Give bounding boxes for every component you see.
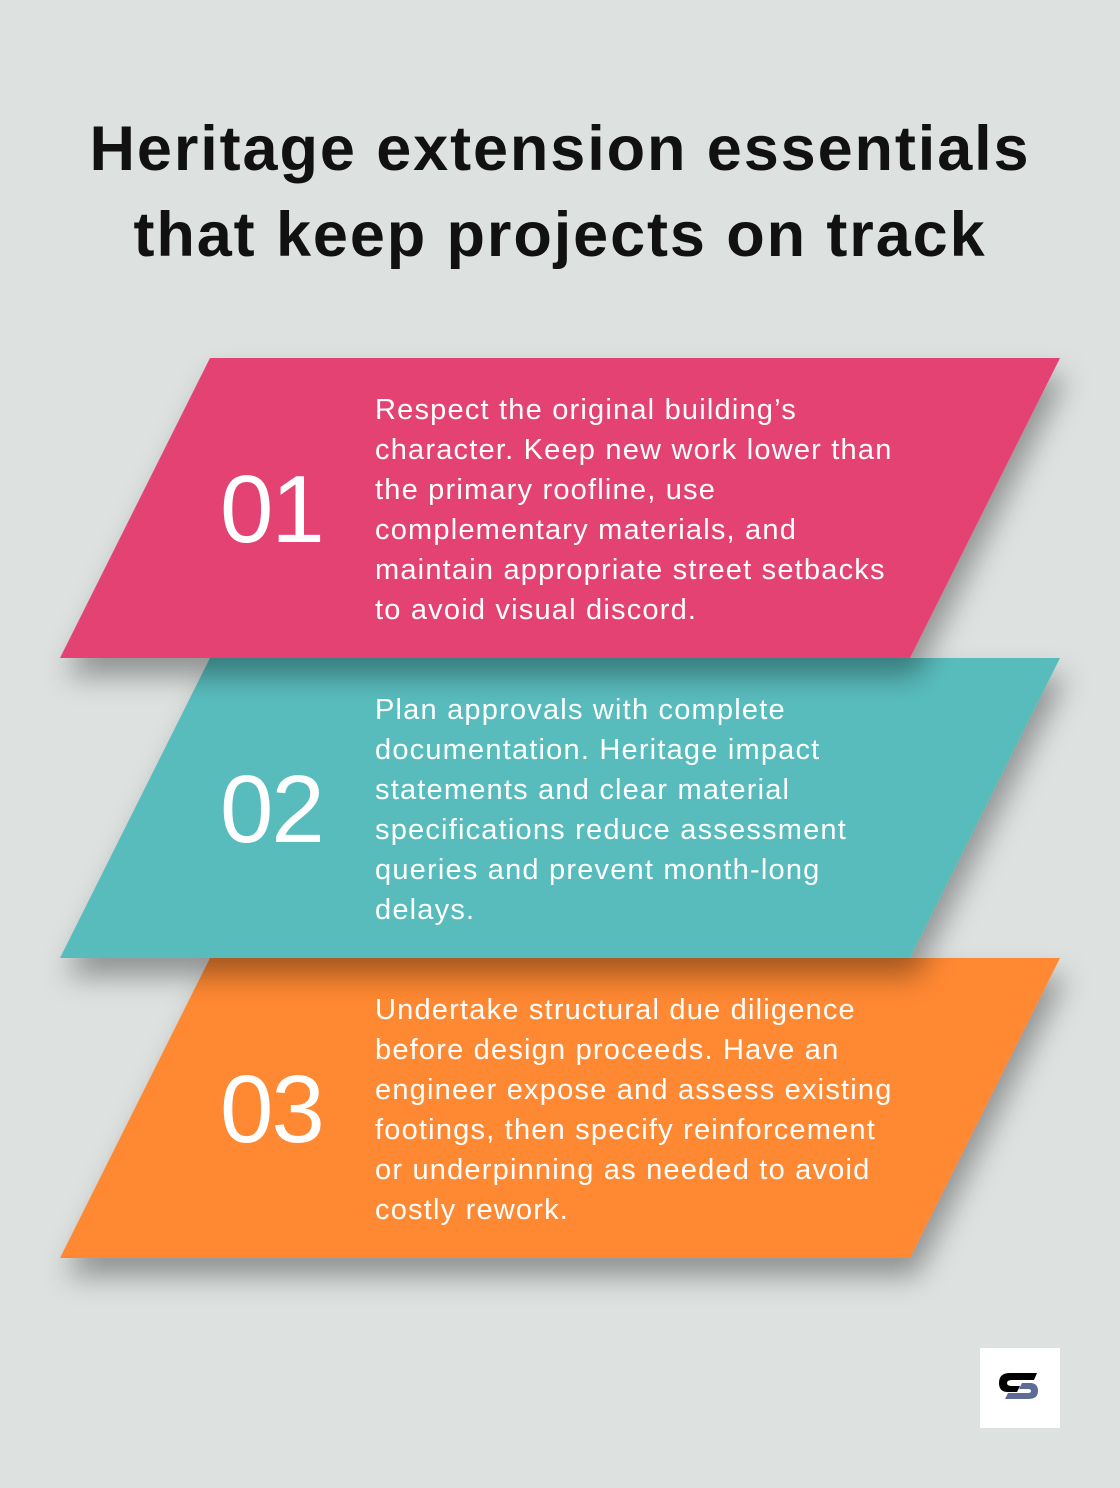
panel 3 text: engineer expose and assess existing [375,1074,893,1106]
panel 2 text: statements and clear material [375,774,790,806]
title: that keep projects on track [133,200,987,270]
panel 1 text: maintain appropriate street setbacks [375,554,886,586]
panel 1 number: 01 [220,456,323,563]
panel 2 text [375,694,847,926]
panel 3 text: footings, then specify reinforcement [375,1114,876,1146]
panel 2 text: delays. [375,894,475,926]
panel 3 shape [60,958,1060,1258]
panel 2 number: 02 [220,756,323,863]
panel 2 text: documentation. Heritage impact [375,734,820,766]
panel 1 text: to avoid visual discord. [375,594,697,626]
panel 1 shape [60,358,1060,658]
panel 3 number: 03 [220,1056,323,1163]
title [90,114,1030,270]
panel 1 text: Respect the original building’s [375,394,797,426]
panel 3 text: Undertake structural due diligence [375,994,856,1026]
panel 3 text [375,994,893,1226]
panel 1 text: complementary materials, and [375,514,797,546]
panel 2 text: Plan approvals with complete [375,694,786,726]
panel 2 text: specifications reduce assessment [375,814,847,846]
panel 2 shape [60,658,1060,958]
title: Heritage extension essentials [90,114,1030,184]
panel 1 text [375,394,893,626]
panel 1 text: the primary roofline, use [375,474,716,506]
panel 1 text: character. Keep new work lower than [375,434,893,466]
panel 3 text: costly rework. [375,1194,569,1226]
logo [980,1348,1060,1428]
panel 3 text: or underpinning as needed to avoid [375,1154,870,1186]
panel 3 text: before design proceeds. Have an [375,1034,839,1066]
panel 2 text: queries and prevent month-long [375,854,820,886]
